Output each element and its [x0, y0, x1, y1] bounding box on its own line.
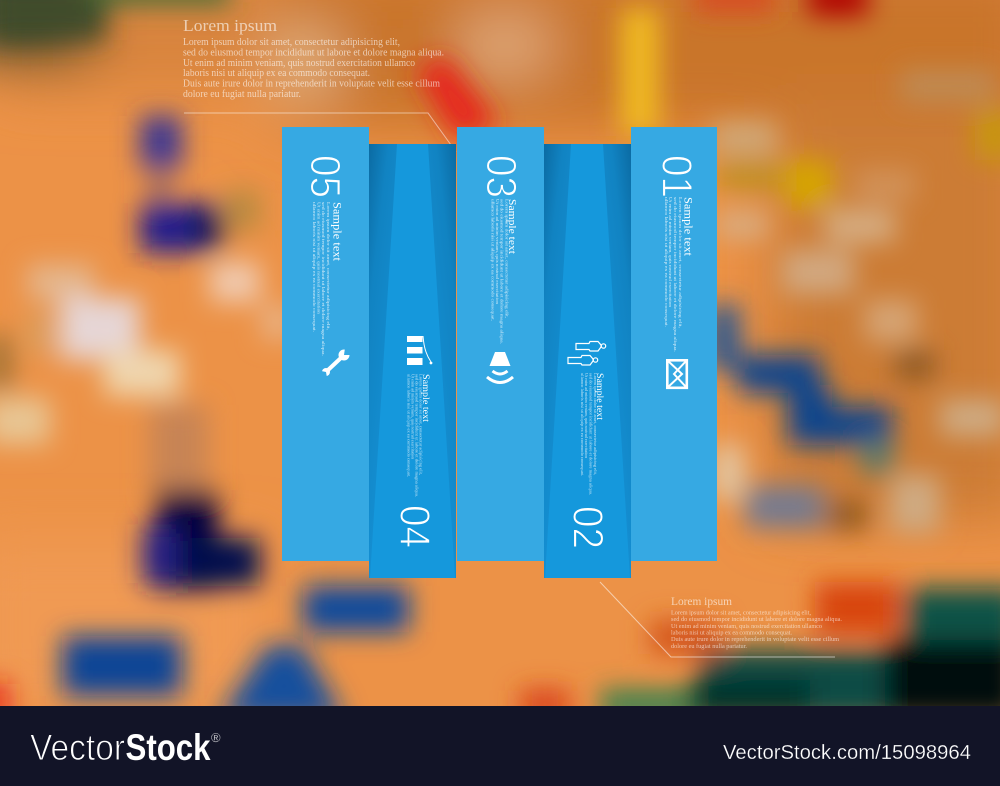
heading 03: Sample text — [506, 199, 518, 254]
heading 02: Sample text — [594, 373, 604, 420]
number 03: 03 — [477, 155, 525, 198]
callout leader line: bottom — [600, 582, 835, 657]
body text 05: sed do eiusmod tempor incididunt ut labore et dolore magna aliqua. — [321, 202, 326, 356]
body text 01: sed do eiusmod tempor incididunt ut labore et dolore magna aliqua. — [673, 197, 678, 352]
icon: two connectors — [568, 342, 606, 365]
body text 02 — [580, 373, 597, 495]
body text 01: Lorem ipsum dolor sit amet, consectetur adipisicing elit, — [677, 197, 683, 328]
body text 03 — [490, 199, 510, 344]
body text 01: Ut enim ad minim veniam, quis nostrud exercitation — [667, 197, 673, 308]
body text 04: Ut enim ad minim veniam, quis nostrud exercitation — [410, 374, 414, 459]
body text 04 — [406, 374, 422, 497]
body text 04: Lorem ipsum dolor sit amet, consectetur adipisicing elit, — [418, 374, 422, 475]
body text 02: Ut enim ad minim veniam, quis nostrud exercitation — [583, 373, 588, 458]
body text 01: ullamco laboris nisi ut aliquip ex ea commodo consequat. — [664, 197, 669, 327]
body text 01 — [664, 197, 683, 352]
body text 04: ullamco laboris nisi ut aliquip ex ea commodo consequat. — [406, 374, 410, 477]
callout leader line: top — [184, 113, 456, 152]
panel 05: light strip — [282, 127, 369, 561]
panel 01: light strip — [631, 127, 717, 561]
icon: envelope — [667, 360, 687, 388]
panel 02: dark folded strip — [544, 144, 631, 578]
body text 05: Lorem ipsum dolor sit amet, consectetur adipisicing elit, — [325, 202, 331, 330]
number 01: 01 — [652, 155, 700, 198]
callout: top text block: dolore eu fugiat nulla pariatur. — [183, 89, 301, 100]
callout: bottom text block: sed do eiusmod tempor incididunt ut labore et dolore magna aliqua. — [671, 616, 842, 623]
callout: top text block: sed do eiusmod tempor incididunt ut labore et dolore magna aliqua. — [183, 48, 444, 58]
right side — [712, 122, 777, 154]
left side — [140, 116, 182, 170]
footer logo — [30, 726, 221, 768]
callout: top text block — [183, 16, 444, 100]
heading 01: Sample text — [682, 197, 694, 257]
body text 03: sed do eiusmod tempor incididunt ut labore et dolore magna aliqua. — [500, 199, 504, 344]
callout: bottom text block: Ut enim ad minim veniam, quis nostrud exercitation ullamco — [671, 623, 823, 630]
bottom right — [815, 582, 899, 634]
footer logo: Vector — [30, 726, 125, 768]
heading 04: Sample text — [420, 374, 430, 422]
body text 03: ullamco laboris nisi ut aliquip ex ea commodo consequat. — [490, 199, 496, 321]
footer image id: VectorStock.com/15098964 — [723, 742, 971, 764]
callout: bottom text block: dolore eu fugiat nulla pariatur. — [671, 643, 747, 650]
number 04: 04 — [390, 505, 438, 548]
number 05: 05 — [301, 155, 349, 198]
callout: top text block: Lorem ipsum dolor sit amet, consectetur adipisicing elit, — [183, 37, 400, 48]
body text 02: ullamco laboris nisi ut aliquip ex ea commodo consequat. — [580, 373, 584, 476]
body text 02: Lorem ipsum dolor sit amet, consectetur adipisicing elit, — [592, 373, 597, 475]
body text 05: Ut enim ad minim veniam, quis nostrud exercitation — [316, 202, 322, 315]
callout: bottom text block: Lorem ipsum — [671, 596, 732, 608]
callout: bottom text block: Lorem ipsum dolor sit amet, consectetur adipisicing elit, — [671, 610, 811, 616]
body text 03: Lorem ipsum dolor sit amet, consectetur adipisicing elit, — [504, 199, 510, 318]
top — [0, 0, 105, 40]
body text 04: sed do eiusmod tempor incididunt ut labore et dolore magna aliqua. — [414, 374, 418, 497]
panel 04: dark folded strip — [369, 144, 456, 578]
body text 05 — [312, 202, 331, 356]
callout: bottom text block: Duis aute irure dolor in reprehenderit in voluptate velit esse cillum — [671, 636, 840, 643]
callout: top text block: Duis aute irure dolor in reprehenderit in voluptate velit esse cillum — [183, 78, 440, 90]
body text 03: Ut enim ad minim veniam, quis nostrud exercitation — [494, 199, 500, 305]
number 02: 02 — [564, 506, 612, 549]
footer logo: Stock — [126, 726, 211, 768]
callout: top text block: laboris nisi ut aliquip ex ea commodo consequat. — [183, 68, 370, 79]
callout: bottom text block: laboris nisi ut aliquip ex ea commodo consequat. — [671, 630, 792, 636]
callout: top text block: Ut enim ad minim veniam, quis nostrud exercitation ullamco — [183, 58, 415, 69]
panel 03: light strip — [457, 127, 544, 561]
icon: wrench — [321, 348, 352, 378]
icon: bell with waves — [487, 352, 513, 382]
body text 05: ullamco laboris nisi ut aliquip ex ea commodo consequat. — [312, 202, 317, 332]
body text 02: sed do eiusmod tempor incididunt ut labore et dolore magna aliqua. — [588, 373, 592, 495]
heading 05: Sample text — [330, 202, 342, 262]
callout: top text block: Lorem ipsum — [183, 16, 277, 35]
callout: bottom text block — [671, 596, 842, 650]
footer logo: ® — [211, 730, 221, 745]
footer bar — [0, 706, 1000, 786]
icon: bar scale — [407, 336, 432, 365]
